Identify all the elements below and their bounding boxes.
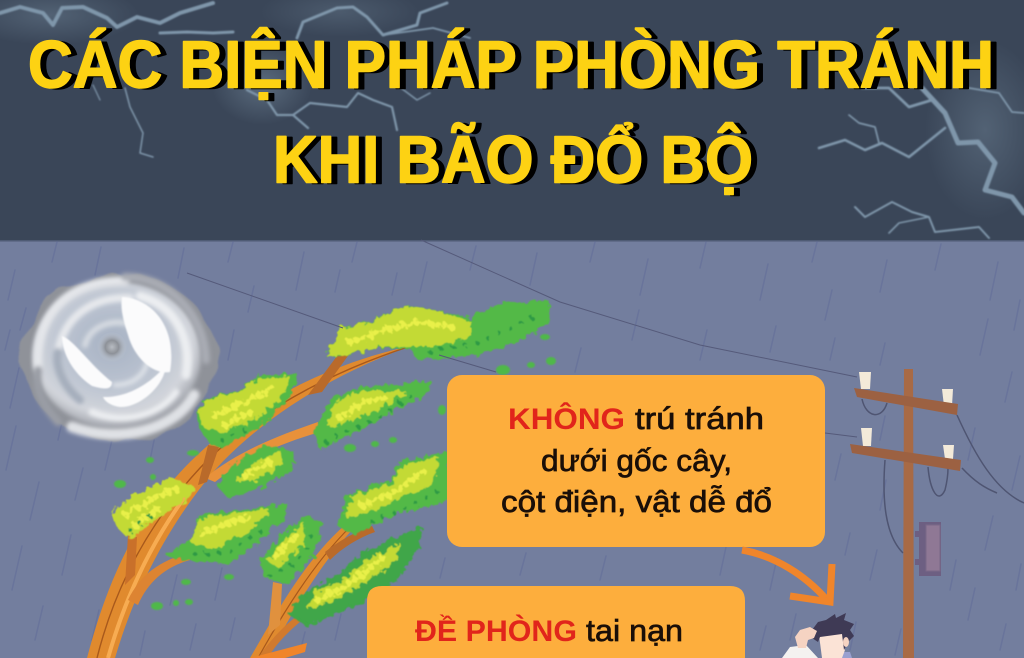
callout: beware of accidents	[367, 586, 745, 658]
lightning bolts	[0, 3, 1024, 238]
person collar	[838, 652, 852, 658]
person hair	[812, 613, 854, 650]
leaf cluster upper right	[316, 382, 430, 448]
leaf cluster lower right	[289, 528, 421, 625]
meter box	[915, 522, 941, 576]
leaf cluster top	[327, 302, 548, 358]
person face	[819, 630, 845, 658]
leaf cluster right	[339, 453, 447, 533]
cyclone eye	[97, 332, 127, 362]
branch to left cluster	[125, 535, 137, 585]
illustration: electric pole	[850, 369, 1024, 658]
illustration: windblown tree	[87, 302, 556, 658]
leaf cluster middle	[218, 447, 293, 497]
cyclone swirl arms	[37, 277, 206, 434]
tree trunk right	[250, 525, 375, 658]
cyclone white bands	[62, 297, 171, 407]
panel: rainy scene background	[0, 240, 1024, 658]
callout text line 1 red: ĐỀ PHÒNG	[415, 614, 577, 648]
person ear	[843, 637, 849, 647]
insulators	[859, 372, 954, 459]
leaf cluster lower left	[168, 505, 286, 562]
callout text line 3: cột điện, vật dễ đổ	[501, 484, 772, 519]
branch to lower cluster	[128, 553, 190, 605]
arrow: lower left arrow head	[250, 643, 307, 658]
callout text line 1: trú tránh	[635, 401, 764, 436]
crossarm upper	[854, 388, 958, 415]
crossarm lower	[850, 444, 961, 471]
rain streaks	[5, 242, 1021, 655]
branch to upper cluster	[308, 352, 350, 395]
callout text line 2: dưới gốc cây,	[541, 443, 732, 478]
title	[28, 28, 1000, 198]
pole post	[903, 369, 914, 658]
title line 2: KHI BÃO ĐỔ BỘ	[273, 122, 753, 198]
branch to right cluster	[205, 422, 320, 482]
falling leaves	[114, 334, 556, 610]
callout: do not shelter under trees	[447, 375, 825, 547]
power lines	[187, 240, 857, 437]
leaf cluster upper left	[198, 375, 296, 447]
leaf cluster left	[112, 478, 193, 538]
panel: storm sky header	[0, 0, 1024, 241]
illustration: person holding head	[782, 613, 854, 658]
arrow: from callout to person	[742, 550, 832, 602]
leaf cluster small lower	[262, 517, 321, 583]
person shirt	[782, 645, 818, 658]
glow behind lightning	[0, 0, 1024, 220]
callout text line 1 red: KHÔNG	[508, 402, 625, 436]
title line 2 shadow: KHI BÃO ĐỔ BỘ	[279, 124, 759, 198]
branch to top left cluster	[198, 445, 219, 485]
person hand	[795, 627, 817, 648]
tree trunk left	[87, 346, 411, 658]
pole wires	[862, 399, 1024, 553]
icon: cyclone	[22, 273, 216, 441]
callout text line 1: tai nạn	[586, 613, 683, 648]
